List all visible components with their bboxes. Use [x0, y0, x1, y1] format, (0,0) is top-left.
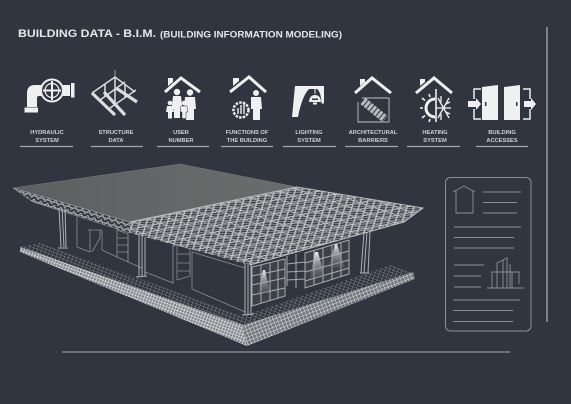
- icon: ceiling lamp in room: [292, 86, 324, 117]
- label: heating system: [407, 130, 460, 146]
- label: architectural barriers: [345, 130, 398, 146]
- icon: pipe and valve: [24, 80, 74, 112]
- label: architectural barriers: BARRIERS: [358, 138, 388, 144]
- label: hydraulic system: [20, 130, 73, 146]
- label: structure data: DATA: [109, 138, 123, 144]
- label: user number: NUMBER: [169, 138, 193, 144]
- icon group: structure data: [91, 70, 143, 146]
- columns: [58, 208, 370, 315]
- text lines: bottom: [453, 300, 520, 322]
- walls and windows: [77, 217, 245, 312]
- icon: structural frame: [92, 70, 137, 115]
- label: lighting system: [283, 130, 336, 146]
- icon group: heating system: [407, 78, 460, 146]
- label: lighting system: SYSTEM: [297, 138, 321, 144]
- roof: space frame lattice: [130, 187, 423, 265]
- divider: horizontal: [62, 351, 510, 353]
- card outline: [446, 178, 531, 331]
- building wireframe: [13, 164, 423, 346]
- title: BUILDING DATA - B.I.M.: [18, 28, 156, 40]
- base slab: [20, 243, 415, 346]
- roof: left edge truss: [13, 188, 130, 233]
- label: user number: USER: [173, 130, 189, 136]
- divider: vertical: [546, 27, 548, 322]
- icon: doors with arrows: [468, 85, 536, 120]
- title: [18, 28, 342, 40]
- label: heating system: HEATING: [422, 130, 448, 136]
- label: user number: [157, 130, 209, 146]
- label: building accesses: BUILDING: [488, 130, 516, 136]
- label: architectural barriers: ARCHITECTURAL: [349, 130, 398, 136]
- icon: house with stairs: [355, 78, 391, 122]
- text lines: top: [483, 192, 521, 213]
- text lines: left of city: [454, 265, 484, 287]
- icon: house with sun and snowflake: [416, 78, 452, 122]
- icon group: user number: [157, 78, 209, 146]
- glazed windows: [252, 240, 349, 306]
- icon group: building accesses: [468, 85, 536, 146]
- icon group: lighting system: [283, 86, 336, 146]
- label: functions of the building: THE BUILDING: [227, 138, 268, 144]
- label: hydraulic system: HYDRAULIC: [30, 130, 64, 136]
- label: hydraulic system: SYSTEM: [35, 138, 59, 144]
- icon: house with family: [165, 78, 200, 120]
- label: lighting system: LIGHTING: [295, 130, 323, 136]
- card: building document: [446, 178, 531, 331]
- icon group: functions of the building: [221, 77, 273, 146]
- text lines: middle: [454, 227, 521, 248]
- title: (BUILDING INFORMATION MODELING): [160, 30, 342, 40]
- roof: gray cladding: [13, 164, 297, 222]
- icon: city buildings: [487, 258, 524, 288]
- label: functions of the building: [221, 130, 273, 146]
- icon group: hydraulic system: [20, 80, 74, 146]
- label: functions of the building: FUNCTIONS OF: [226, 130, 269, 136]
- label: structure data: [91, 130, 143, 146]
- icon group: architectural barriers: [345, 78, 398, 146]
- icon: house with person and gear: [230, 77, 266, 120]
- label: building accesses: [476, 130, 528, 146]
- icon: house outline: [453, 186, 475, 213]
- label: building accesses: ACCESSES: [486, 138, 518, 144]
- label: heating system: SYSTEM: [423, 138, 447, 144]
- label: structure data: STRUCTURE: [98, 130, 134, 136]
